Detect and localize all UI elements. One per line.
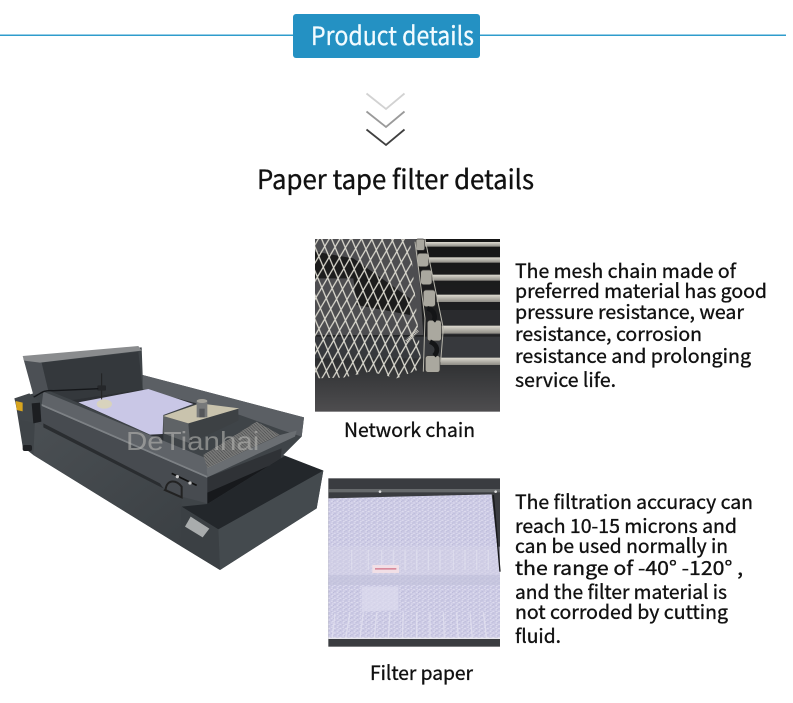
description: network chain [515,255,767,393]
inlet pipe [197,399,207,417]
caption: Filter paper: Filter paper [370,657,473,686]
description: filter paper: and the filter material is [515,576,727,605]
icon: triple chevron arrow [366,94,404,145]
chain links [416,239,441,372]
description: filter paper: not corroded by cutting [515,596,728,625]
description: network chain: service life. [515,364,616,393]
caption: Network chain: Network chain [344,414,475,443]
product photo: paper tape filter machine [14,346,323,570]
inlet tank [188,408,238,443]
tank label [185,517,209,537]
conveyor mesh [203,422,280,468]
description: filter paper: can be used normally in [515,530,728,559]
bearing bracket [165,481,182,497]
cable [33,389,98,397]
collection tank inside [182,456,323,529]
warning label [16,401,23,411]
photo: filter paper [328,478,500,647]
front rail [42,392,207,477]
dark shaft behind mesh [315,337,500,358]
header rule [0,34,786,36]
sensor float [97,373,112,409]
wire mesh [315,239,422,378]
grey backdrop behind mesh [315,239,423,335]
hopper side [23,358,48,395]
description: filter paper: the range of -40° -120° , [515,552,743,581]
panel below rail [35,406,207,503]
description: network chain: The mesh chain made of [515,255,737,284]
rods [425,242,500,365]
hopper top cover [23,346,142,363]
motor slot [32,403,41,423]
collection tank front [218,471,323,570]
hopper front [42,352,143,400]
description: filter paper: fluid. [515,620,561,649]
description: filter paper: reach 10-15 microns and [515,510,737,539]
conveyor underside [207,448,282,493]
filter bed [72,389,197,441]
description: network chain: resistance, corrosion [515,318,702,347]
photo: network chain [315,239,500,412]
description: network chain: pressure resistance, wear [515,296,744,325]
description: filter paper [515,486,753,649]
description: network chain: preferred material has good [515,275,767,304]
lower body [33,422,182,547]
long rail on side [43,423,163,488]
machine silhouette [15,347,323,570]
filter paper [78,389,193,435]
collection tank left [181,507,220,570]
description: network chain: resistance and prolonging [515,340,751,369]
side plate controls [172,473,197,485]
control box [14,393,41,423]
side knob [23,445,32,451]
description: filter paper: The filtration accuracy can [515,486,753,515]
title: Paper tape filter details [257,158,534,197]
watermark: DeTianhai [126,426,259,456]
rear wall [143,375,304,437]
header badge: Product details: Product details [311,16,474,53]
